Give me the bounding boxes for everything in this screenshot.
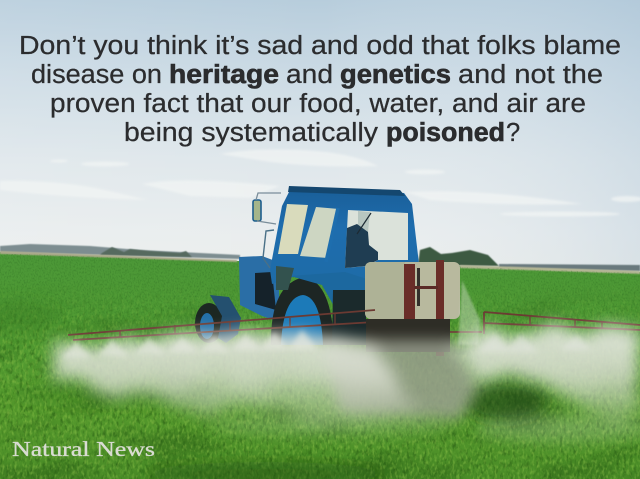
headline text bbox=[19, 32, 621, 147]
chemical tank bbox=[365, 260, 460, 356]
front wheel bbox=[195, 295, 241, 343]
logo: Natural News: Natural News bbox=[12, 437, 155, 461]
tractor bbox=[68, 186, 640, 356]
dim mist under tractor bbox=[320, 340, 480, 420]
line 2: genetics bbox=[340, 61, 451, 89]
line 2: and not the bbox=[458, 61, 603, 89]
line 2: heritage bbox=[169, 61, 279, 89]
line 4: being systematically bbox=[124, 119, 378, 147]
background: sky bbox=[0, 0, 640, 275]
undercarriage shadow bbox=[366, 319, 450, 352]
engine detail bbox=[255, 272, 276, 310]
clouds bbox=[0, 150, 640, 216]
cab windows bbox=[278, 204, 408, 268]
rear hood bbox=[239, 256, 280, 322]
faint low drift bbox=[475, 414, 640, 442]
rear wheel bbox=[271, 277, 334, 345]
line 4: poisoned bbox=[386, 119, 505, 147]
lower cab panel bbox=[290, 272, 370, 310]
far-right mist bbox=[452, 330, 640, 420]
left mist bbox=[52, 333, 420, 422]
side mirror bbox=[253, 193, 281, 268]
line 2: and bbox=[286, 61, 333, 89]
line 1: Don’t you think it’s sad and odd that folks blame bbox=[19, 32, 621, 60]
line 4: ? bbox=[506, 119, 520, 147]
line 4 bbox=[124, 119, 520, 147]
line 2: disease on bbox=[31, 61, 162, 89]
spray boom bbox=[68, 310, 640, 340]
nozzle puffs bbox=[62, 330, 318, 358]
distant tree line bbox=[0, 244, 640, 271]
line 2 bbox=[31, 61, 603, 89]
mist rising behind the tank bbox=[458, 280, 480, 345]
spray cloud bbox=[52, 280, 640, 442]
cab bbox=[270, 186, 419, 345]
line 3: proven fact that our food, water, and air are bbox=[50, 90, 586, 118]
field bbox=[0, 251, 640, 479]
